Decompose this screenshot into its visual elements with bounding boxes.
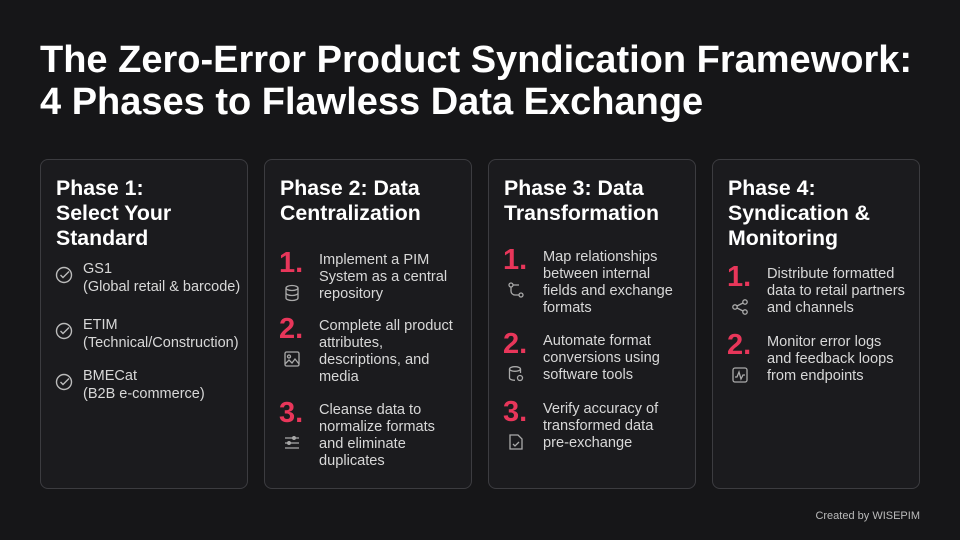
step 3.2: Automate format: [543, 333, 651, 349]
step 4.2: from endpoints: [767, 368, 864, 384]
panel: phase 4: [712, 159, 920, 489]
panel: phase 1: [40, 159, 248, 489]
item: GS1: GS1: [83, 261, 112, 277]
step 3.2: [503, 328, 660, 383]
footer credit: Created by WISEPIM: [815, 510, 920, 522]
step 3.2: conversions using: [543, 350, 660, 366]
title: 4 Phases to Flawless Data Exchange: [40, 81, 703, 123]
step 3.3: [503, 396, 658, 451]
heading: phase 1: Standard: [56, 226, 148, 250]
step 3.2: software tools: [543, 367, 633, 383]
step 4.1: 1.: [727, 261, 751, 293]
item: BMECat: BMECat: [83, 368, 137, 384]
item: GS1: (Global retail & barcode): [83, 279, 240, 295]
step 3.2: 2.: [503, 328, 527, 360]
step 4.2: and feedback loops: [767, 351, 894, 367]
heading: phase 2: Phase 2: Data: [280, 176, 420, 200]
step 2.2: attributes,: [319, 335, 383, 351]
step 3.1: Map relationships: [543, 249, 657, 265]
step 2.3: duplicates: [319, 453, 385, 469]
item: GS1: [56, 261, 240, 295]
step 2.3: Cleanse data to: [319, 402, 421, 418]
item: ETIM: [56, 317, 239, 351]
heading: phase 1: [56, 176, 171, 250]
step 3.3: transformed data: [543, 418, 653, 434]
heading: phase 4: Monitoring: [728, 226, 838, 250]
step 4.1: [727, 261, 905, 316]
panel: phase 3: [488, 159, 696, 489]
item: BMECat: [56, 368, 205, 402]
panel: phase 2: [264, 159, 472, 489]
step 2.1: repository: [319, 286, 383, 302]
title: The Zero-Error Product Syndication Framework:: [40, 39, 912, 81]
step 2.2: descriptions, and: [319, 352, 429, 368]
step 2.1: [279, 247, 447, 302]
step 2.3: and eliminate: [319, 436, 406, 452]
heading: phase 1: Phase 1:: [56, 176, 144, 200]
step 4.2: 2.: [727, 329, 751, 361]
step 2.1: Implement a PIM: [319, 252, 429, 268]
heading: phase 3: Transformation: [504, 201, 659, 225]
heading: phase 2: Centralization: [280, 201, 421, 225]
item: ETIM: (Technical/Construction): [83, 335, 239, 351]
step 3.1: fields and exchange: [543, 283, 673, 299]
step 2.3: [279, 397, 435, 469]
step 4.2: Monitor error logs: [767, 334, 881, 350]
step 2.3: normalize formats: [319, 419, 435, 435]
step 2.1: 1.: [279, 247, 303, 279]
step 4.2: [727, 329, 894, 384]
heading: phase 3: [504, 176, 659, 225]
heading: phase 2: [280, 176, 421, 225]
step 3.1: [503, 244, 673, 316]
step 4.1: and channels: [767, 300, 854, 316]
heading: phase 4: Syndication &: [728, 201, 870, 225]
heading: phase 4: [728, 176, 870, 250]
step 2.2: Complete all product: [319, 318, 453, 334]
item: BMECat: (B2B e-commerce): [83, 386, 205, 402]
step 2.3: 3.: [279, 397, 303, 429]
step 2.2: media: [319, 369, 359, 385]
item: ETIM: ETIM: [83, 317, 118, 333]
step 2.2: [279, 313, 453, 385]
step 3.1: between internal: [543, 266, 650, 282]
step 4.1: data to retail partners: [767, 283, 905, 299]
step 3.1: 1.: [503, 244, 527, 276]
step 4.1: Distribute formatted: [767, 266, 894, 282]
heading: phase 1: Select Your: [56, 201, 171, 225]
step 2.1: System as a central: [319, 269, 447, 285]
step 3.3: Verify accuracy of: [543, 401, 658, 417]
step 3.3: 3.: [503, 396, 527, 428]
heading: phase 4: Phase 4:: [728, 176, 816, 200]
step 2.2: 2.: [279, 313, 303, 345]
heading: phase 3: Phase 3: Data: [504, 176, 644, 200]
title: [40, 39, 912, 123]
step 3.3: pre-exchange: [543, 435, 632, 451]
step 3.1: formats: [543, 300, 592, 316]
